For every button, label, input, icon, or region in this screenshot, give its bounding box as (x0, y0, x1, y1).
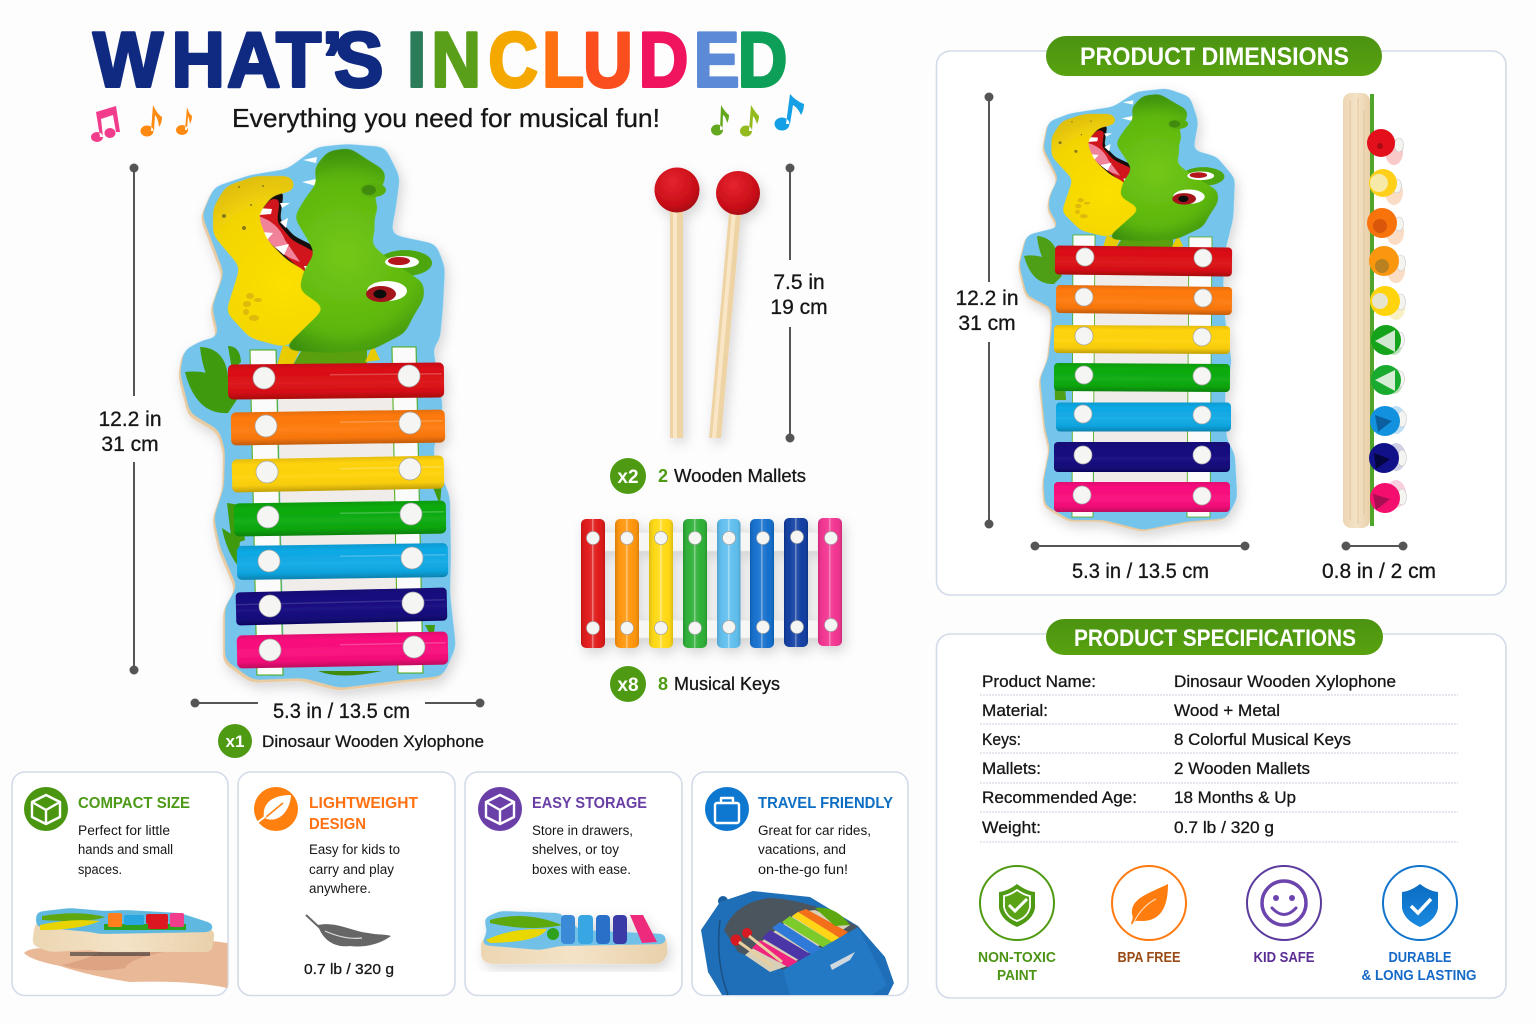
dinosaur head (213, 148, 432, 365)
dimension: mallet length (770, 164, 828, 442)
description: Great for car rides, (758, 823, 871, 838)
spec table: Dinosaur Wooden Xylophone (1174, 672, 1396, 691)
key 8 (818, 518, 842, 646)
spec table (980, 672, 1458, 842)
heading: LIGHTWEIGHT (309, 795, 418, 812)
key 7 (784, 518, 808, 647)
subtitle: Everything you need for musical fun! (232, 103, 660, 133)
spec table: 8 Colorful Musical Keys (1174, 730, 1351, 749)
badge: non-toxic paint: PAINT (997, 968, 1037, 984)
label: x8 keys: 8 (658, 674, 668, 694)
yellow key (232, 456, 444, 492)
label: x2 mallets: x2 (617, 467, 639, 488)
weight: 0.7 lb / 320 g (304, 962, 394, 978)
dimension: front height: 12.2 in (955, 287, 1019, 310)
dimension: front width (1030, 542, 1250, 583)
orange key (1056, 285, 1232, 315)
dimension: main width: 5.3 in / 13.5 cm (273, 700, 410, 723)
description: vacations, and (758, 842, 846, 857)
photo: xylophone on hand (24, 908, 228, 988)
description: Store in drawers, (532, 823, 633, 838)
rails (603, 532, 818, 638)
inner panel (278, 395, 400, 665)
dimension: front height: 31 cm (958, 312, 1016, 335)
title (93, 15, 787, 104)
panel: product specifications (936, 619, 1506, 998)
title: L (542, 15, 584, 103)
icon: music notes right (711, 94, 804, 136)
description: on-the-go fun! (758, 862, 848, 877)
wood edge (1018, 90, 1236, 532)
dimension: main height: 12.2 in (98, 408, 162, 431)
blue board (180, 144, 456, 688)
red key (1055, 246, 1232, 277)
badge: non-toxic paint: NON-TOXIC (978, 950, 1056, 966)
dimension: front height (955, 92, 1019, 528)
heading pill (1046, 619, 1383, 655)
spec table: Weight: (982, 818, 1041, 837)
key 4 (683, 519, 707, 648)
badge: bpa free (1112, 866, 1186, 966)
navy key (1054, 442, 1230, 472)
spec table: Wood + Metal (1174, 701, 1280, 720)
badge: bpa free: BPA FREE (1118, 950, 1181, 966)
icon: cube (24, 787, 68, 831)
heading pill: PRODUCT DIMENSIONS (1080, 43, 1349, 71)
spec table: Keys: (982, 730, 1021, 749)
badge: kid safe: KID SAFE (1254, 950, 1315, 966)
label: x2 mallets: Wooden Mallets (674, 466, 806, 486)
spec table: Material: (982, 701, 1048, 720)
description: carry and play (309, 862, 394, 877)
title: WHAT’S (93, 17, 383, 104)
leaves (1024, 236, 1066, 400)
spec table: Product Name: (982, 672, 1096, 691)
title: U (583, 15, 633, 103)
orange key (231, 410, 445, 445)
card: easy storage (465, 772, 682, 996)
mallet 2 (709, 171, 760, 438)
green key (234, 501, 446, 536)
description (309, 842, 400, 896)
blue board (1019, 88, 1237, 530)
card: compact size (12, 772, 228, 996)
title: E (694, 15, 739, 103)
description (78, 823, 173, 877)
blue key (1056, 402, 1231, 432)
description: anywhere. (309, 881, 371, 896)
white rails (1072, 235, 1095, 517)
mallet 1 (654, 168, 700, 438)
musical keys photo (581, 518, 842, 648)
spec table: 0.7 lb / 320 g (1174, 818, 1274, 837)
description: hands and small (78, 842, 173, 857)
dimension: mallet length: 7.5 in (773, 271, 825, 294)
dinosaur head (1051, 94, 1224, 250)
label: x8 keys (610, 666, 780, 702)
mallets photo (654, 168, 760, 438)
inner panel (1094, 270, 1190, 510)
key 5 (717, 519, 740, 648)
card: lightweight design (238, 772, 455, 996)
white rails (250, 350, 283, 675)
title: C (488, 15, 538, 103)
photo: xylophone side (481, 911, 668, 964)
heading: COMPACT SIZE (78, 795, 190, 812)
spec table: Recommended Age: (982, 788, 1137, 807)
badge: durable and long lasting (1362, 866, 1476, 984)
wood grain (1350, 98, 1364, 524)
main xylophone photo (178, 144, 456, 691)
leaves (185, 346, 245, 566)
dimension: main width (190, 698, 484, 723)
heading pill (1046, 36, 1382, 76)
description: shelves, or toy (532, 842, 619, 857)
description (532, 823, 633, 877)
dimension: mallet length: 19 cm (770, 296, 828, 319)
spec table: 2 Wooden Mallets (1174, 759, 1310, 778)
navy key (236, 587, 447, 625)
painted edge (1370, 94, 1374, 526)
icon: music notes left (91, 105, 192, 142)
key 3 (649, 519, 673, 648)
badge: non-toxic paint (978, 866, 1056, 984)
front view xylophone (1018, 88, 1237, 532)
spec table: 18 Months & Up (1174, 788, 1296, 807)
label: x1 xylophone: x1 (226, 732, 244, 751)
icon: feather (306, 915, 391, 947)
description: Easy for kids to (309, 842, 400, 857)
dimension: front width: 5.3 in / 13.5 cm (1072, 560, 1209, 583)
icon: leaf (254, 787, 298, 831)
label: x2 mallets: 2 (658, 466, 668, 486)
description: Perfect for little (78, 823, 170, 838)
label: x1 xylophone (218, 724, 484, 758)
icon: box (478, 787, 522, 831)
title: N (431, 15, 481, 103)
title: D (639, 15, 688, 103)
title: I (407, 15, 426, 103)
side keys (1367, 129, 1406, 513)
label: x1 xylophone: Dinosaur Wooden Xylophone (262, 732, 484, 751)
dimension: main height (98, 164, 162, 674)
key 1 (581, 519, 605, 648)
blue key (237, 543, 448, 580)
dimension: main height: 31 cm (101, 433, 159, 456)
label: x8 keys: Musical Keys (674, 674, 780, 694)
label: x8 keys: x8 (617, 675, 639, 696)
panel: product dimensions (936, 36, 1506, 595)
side view xylophone (1343, 93, 1406, 528)
wood edge (178, 147, 454, 691)
red key (228, 363, 444, 399)
green key (1054, 363, 1230, 392)
heading: EASY STORAGE (532, 795, 647, 812)
key 2 (615, 519, 639, 648)
dimension: depth: 0.8 in / 2 cm (1322, 560, 1436, 583)
wood board (1343, 93, 1370, 528)
description: boxes with ease. (532, 862, 631, 877)
photo: backpack (701, 891, 894, 995)
pink key (1054, 482, 1230, 512)
card: travel friendly (692, 772, 908, 996)
pink key (237, 631, 448, 668)
badge: kid safe (1247, 866, 1321, 966)
label: x2 mallets (610, 458, 806, 494)
badge: durable and long lasting: DURABLE (1388, 950, 1452, 966)
badge: durable and long lasting: & LONG LASTING (1362, 968, 1476, 984)
dimension: depth (1322, 542, 1436, 583)
icon: bag (705, 787, 749, 831)
title: D (738, 15, 787, 103)
heading: TRAVEL FRIENDLY (758, 795, 893, 812)
description: spaces. (78, 862, 122, 877)
heading pill: PRODUCT SPECIFICATIONS (1074, 625, 1356, 652)
spec table: Mallets: (982, 759, 1041, 778)
key 6 (750, 519, 774, 648)
yellow key (1054, 325, 1230, 354)
description (758, 823, 871, 877)
heading: DESIGN (309, 816, 366, 833)
heading (309, 795, 418, 833)
